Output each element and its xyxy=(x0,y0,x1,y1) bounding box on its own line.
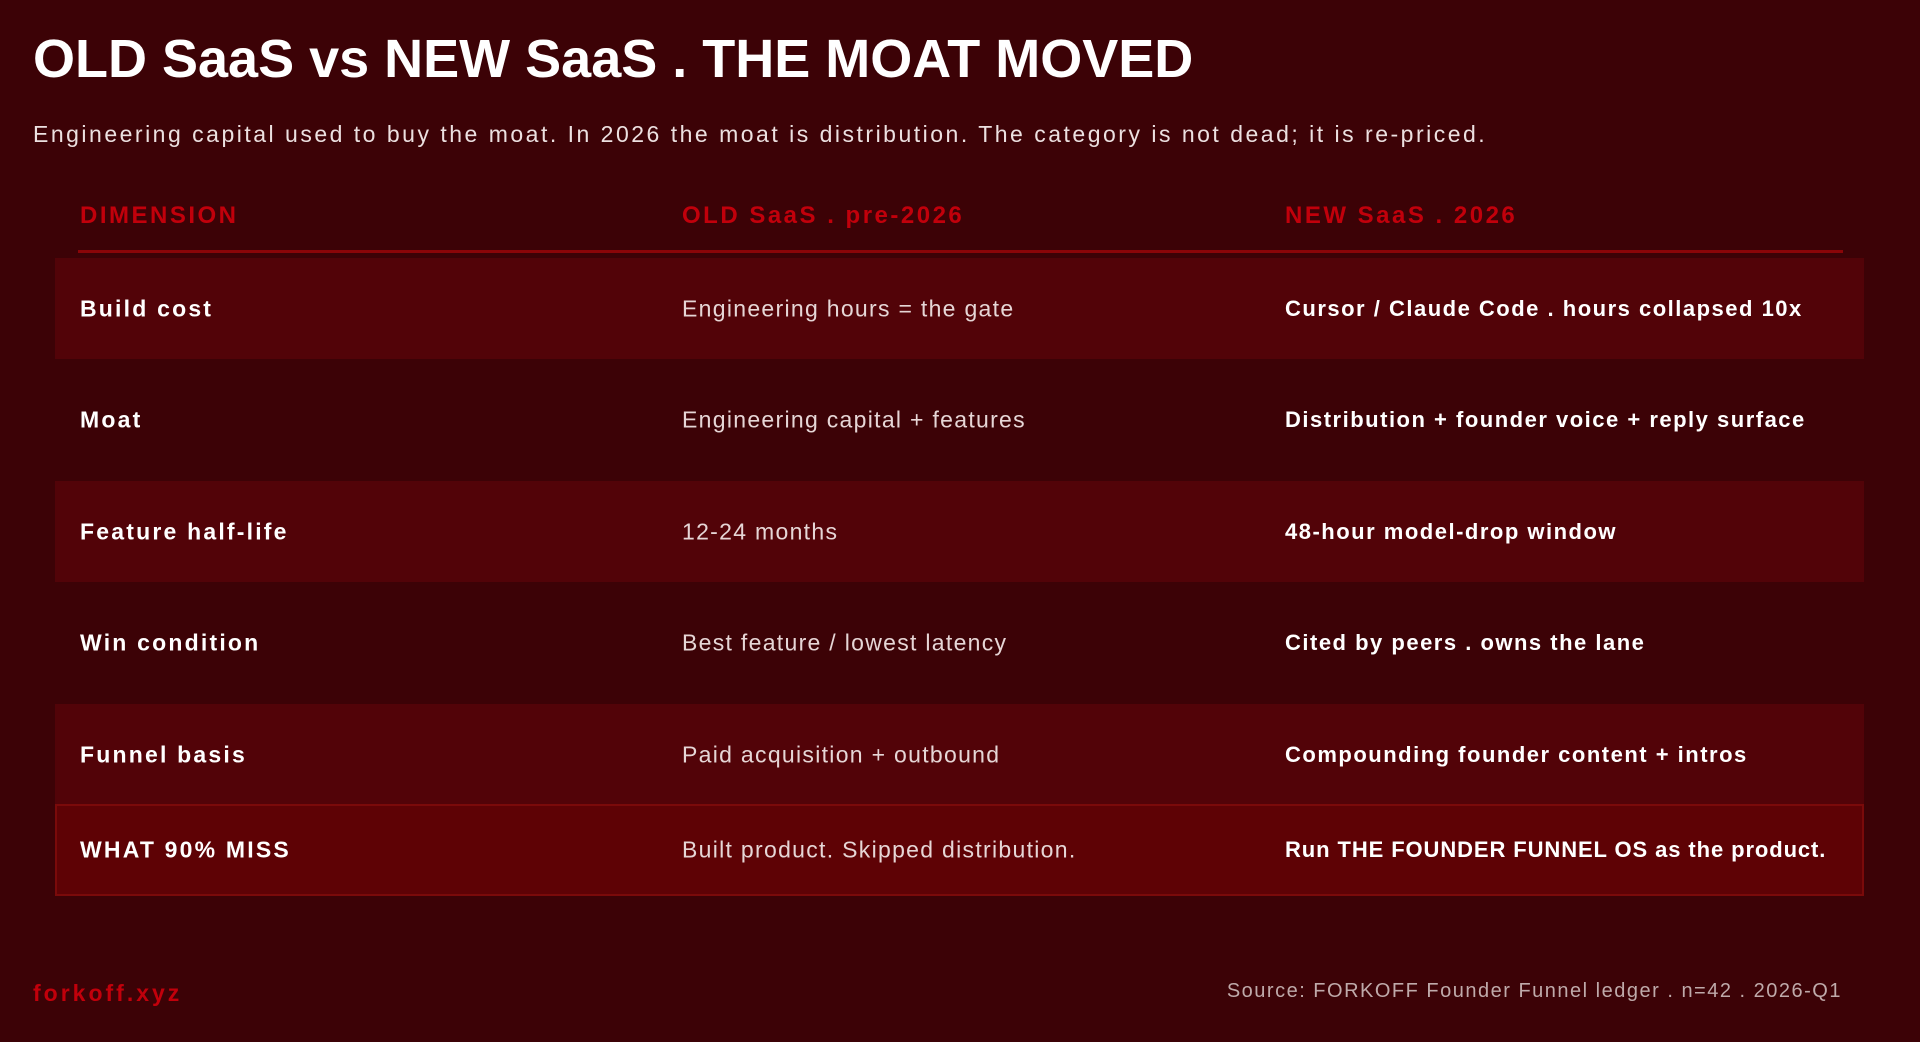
row: funnel basis: Compounding founder content + intros xyxy=(1285,742,1748,766)
header: new saas: NEW SaaS . 2026 xyxy=(1285,202,1517,229)
row: feature half-life: 12-24 months xyxy=(682,518,838,544)
row: what 90% miss xyxy=(55,804,1864,896)
table xyxy=(55,202,1864,896)
title: OLD SaaS vs NEW SaaS . THE MOAT MOVED xyxy=(33,29,1193,89)
subtitle: Engineering capital used to buy the moat. In 2026 the moat is distribution. The category is not dead; it is re-priced. xyxy=(33,121,1487,147)
row: win condition: Cited by peers . owns the lane xyxy=(1285,630,1645,654)
row: build cost xyxy=(55,258,1864,359)
row: build cost: Engineering hours = the gate xyxy=(682,295,1014,321)
row: feature half-life xyxy=(55,481,1864,582)
row: what 90% miss: Run THE FOUNDER FUNNEL OS as the product. xyxy=(1285,837,1826,862)
footer: brand: forkoff.xyz xyxy=(33,980,182,1006)
row: what 90% miss: WHAT 90% MISS xyxy=(80,836,291,862)
row: moat xyxy=(80,406,1806,432)
row: moat: Engineering capital + features xyxy=(682,406,1026,432)
header: old saas: OLD SaaS . pre-2026 xyxy=(682,202,964,229)
footer: source: Source: FORKOFF Founder Funnel ledger . n=42 . 2026-Q1 xyxy=(1227,980,1842,1002)
header: dimension: DIMENSION xyxy=(80,202,239,229)
row: moat: Moat xyxy=(80,406,142,432)
row: build cost: Build cost xyxy=(80,295,213,321)
row: funnel basis xyxy=(55,704,1864,805)
row: win condition: Best feature / lowest latency xyxy=(682,629,1007,655)
row: feature half-life: 48-hour model-drop window xyxy=(1285,518,1617,544)
row: funnel basis: Funnel basis xyxy=(80,741,247,767)
row: feature half-life: Feature half-life xyxy=(80,518,289,544)
row: moat: Distribution + founder voice + reply surface xyxy=(1285,406,1806,432)
row: win condition: Win condition xyxy=(80,629,260,655)
row: build cost: Cursor / Claude Code . hours collapsed 10x xyxy=(1285,296,1803,320)
row: what 90% miss: Built product. Skipped distribution. xyxy=(682,836,1077,862)
row: funnel basis: Paid acquisition + outbound xyxy=(682,741,1000,767)
row: win condition xyxy=(80,629,1645,656)
